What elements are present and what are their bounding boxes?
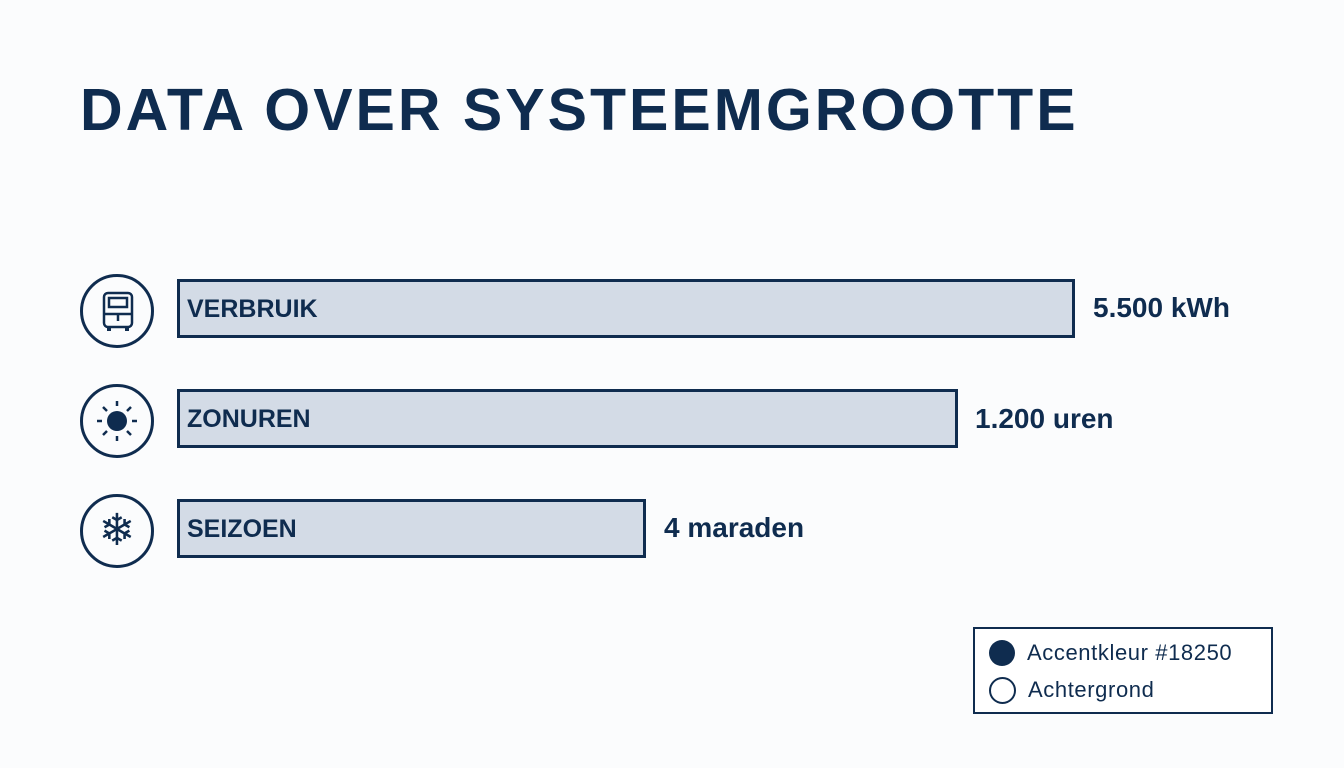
icon: snowflake [80,494,154,568]
value: seizoen: 4 maraden [664,512,804,543]
bar: zonuren [177,389,958,448]
bar: verbruik: VERBRUIK [187,295,318,323]
icon: meter [80,274,154,348]
bar: seizoen: SEIZOEN [187,515,297,543]
legend item: accent: Accentkleur #18250 [1027,640,1232,665]
icon: sun [80,384,154,458]
bar: verbruik [177,279,1075,338]
value: zonuren: 1.200 uren [975,403,1114,434]
title: DATA OVER SYSTEEMGROOTTE [80,77,1079,143]
legend [973,627,1273,714]
legend item: background: Achtergrond [1028,677,1154,702]
value: verbruik: 5.500 kWh [1093,292,1230,323]
icon: snowflake: ❄ [99,505,135,556]
bar: zonuren: ZONUREN [187,405,311,433]
bar: seizoen [177,499,646,558]
